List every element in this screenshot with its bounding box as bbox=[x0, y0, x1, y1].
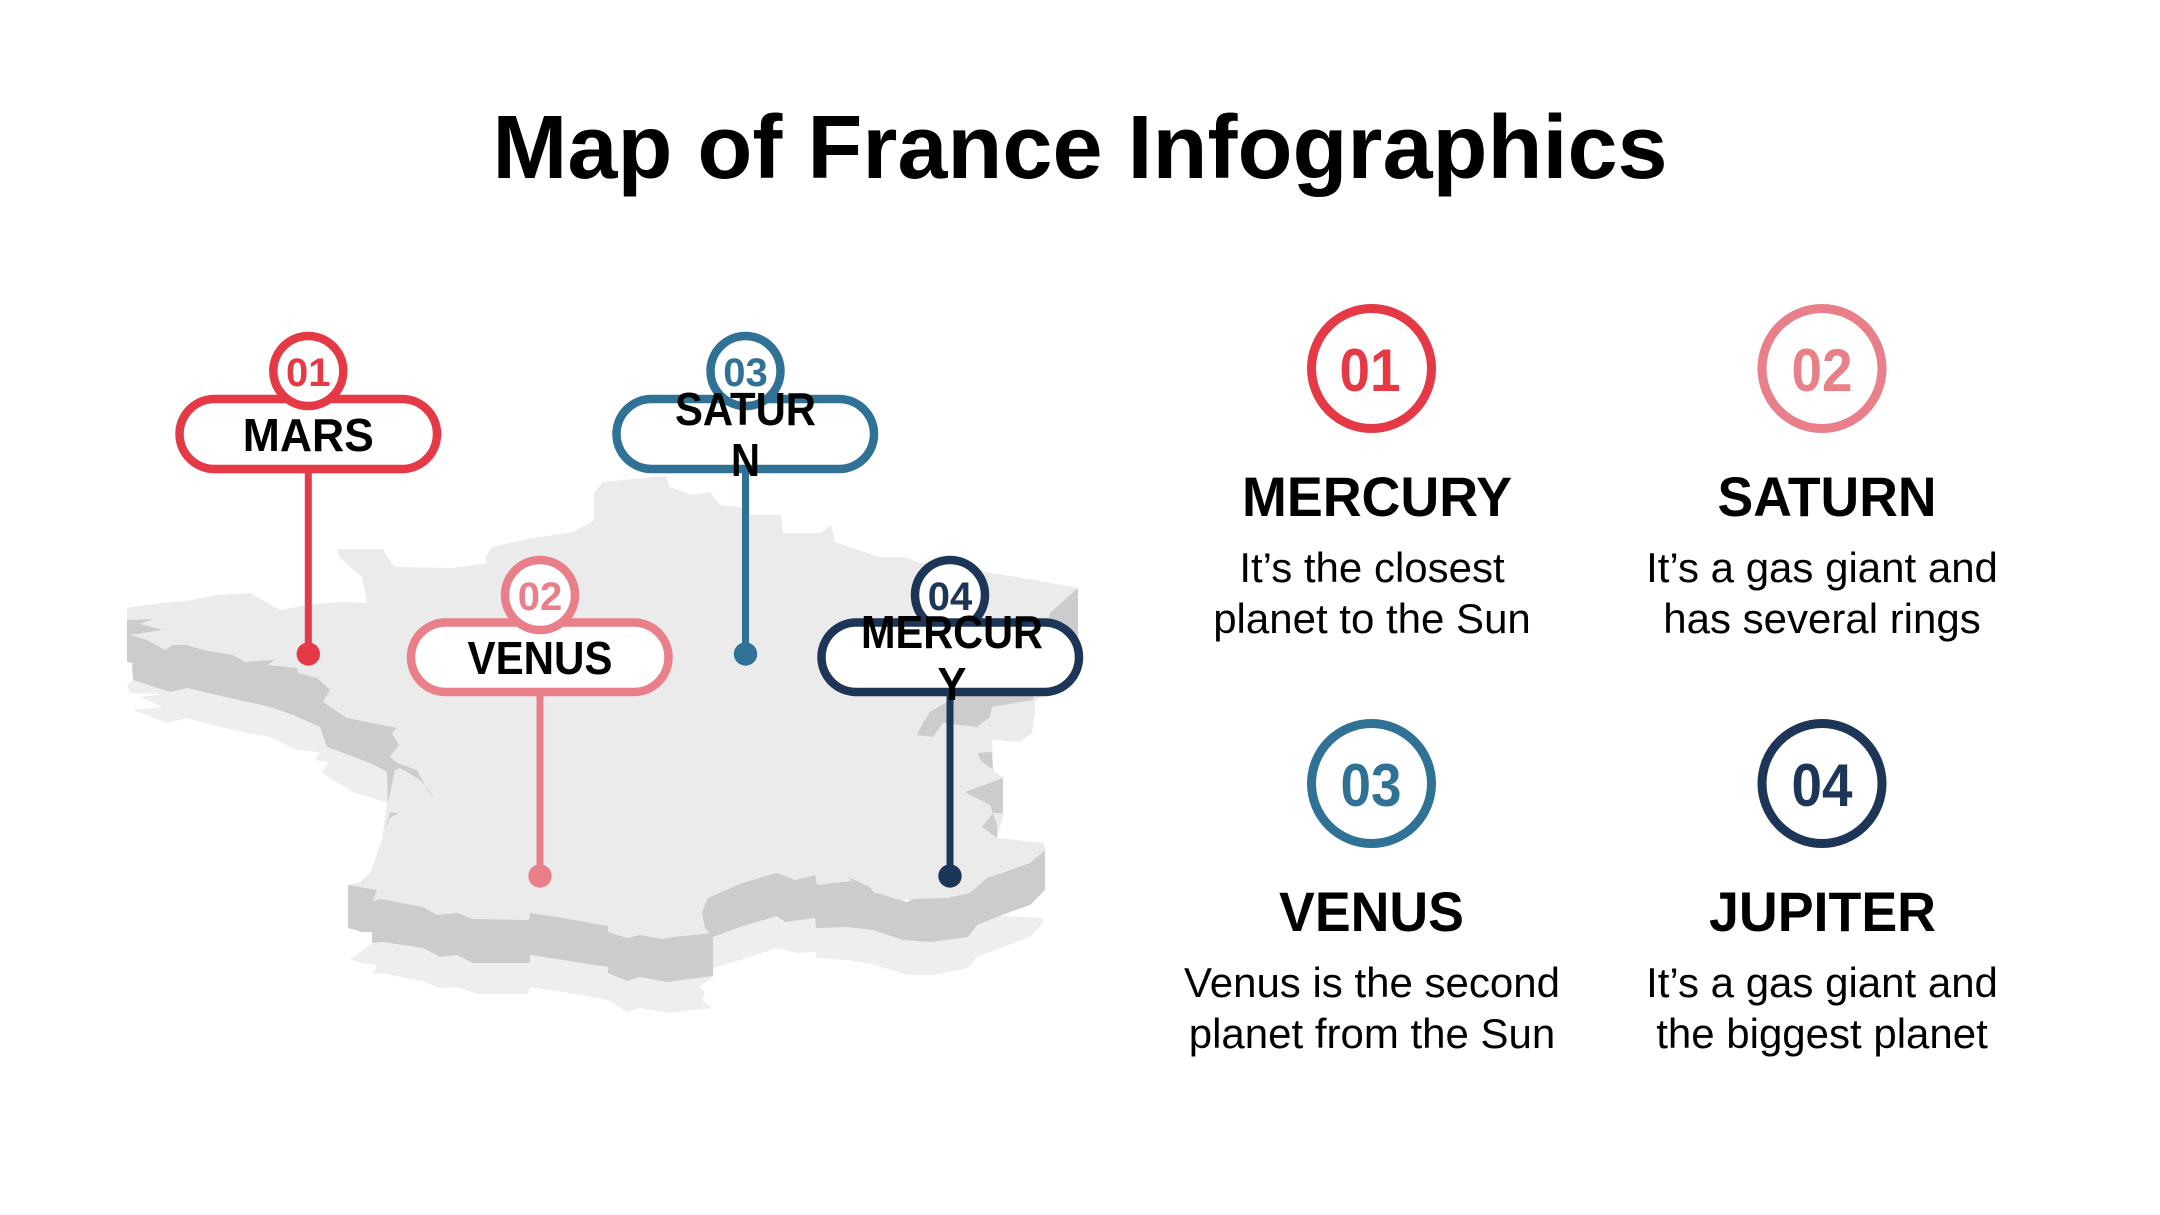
map pin 01 MARS bbox=[180, 336, 437, 666]
map pin 01 MARS: MARS bbox=[243, 409, 374, 461]
info block 01 MERCURY: MERCURY bbox=[1242, 465, 1512, 528]
info block 04 JUPITER: 04 bbox=[1792, 752, 1853, 819]
info block 01 MERCURY bbox=[1213, 308, 1531, 642]
info block 03 VENUS: VENUS bbox=[1279, 880, 1464, 943]
map pin 02 VENUS: VENUS bbox=[468, 632, 612, 684]
info block 04 JUPITER: the biggest planet bbox=[1656, 1010, 1988, 1057]
map pin 02 VENUS: 02 bbox=[518, 575, 562, 619]
map pin 02 VENUS bbox=[411, 560, 668, 888]
map pin 03 SATURN: N bbox=[731, 434, 760, 486]
map pin 04 MERCURY: 04 bbox=[928, 575, 973, 619]
map pin 04 MERCURY bbox=[822, 560, 1079, 888]
info block 03 VENUS: Venus is the second bbox=[1184, 959, 1560, 1006]
map pin 03 SATURN: SATUR bbox=[675, 383, 816, 435]
info block 01 MERCURY: It’s the closest bbox=[1239, 544, 1505, 591]
info block 01 MERCURY: 01 bbox=[1340, 337, 1400, 404]
info block 01 MERCURY: planet to the Sun bbox=[1213, 595, 1531, 642]
map of France bbox=[127, 476, 1078, 1013]
info block 02 SATURN: It’s a gas giant and bbox=[1646, 544, 1998, 591]
info block 03 VENUS: planet from the Sun bbox=[1189, 1010, 1555, 1057]
info block 03 VENUS bbox=[1184, 724, 1560, 1057]
info block 02 SATURN: has several rings bbox=[1663, 595, 1981, 642]
info block 02 SATURN: 02 bbox=[1792, 337, 1852, 404]
info block 04 JUPITER: JUPITER bbox=[1709, 880, 1936, 943]
info block 02 SATURN: SATURN bbox=[1718, 465, 1936, 528]
map pin 04 MERCURY: MERCUR bbox=[861, 606, 1043, 658]
info block 03 VENUS: 03 bbox=[1340, 752, 1402, 819]
info block 04 JUPITER: It’s a gas giant and bbox=[1646, 959, 1998, 1006]
map pin 04 MERCURY: Y bbox=[938, 658, 966, 710]
info block 04 JUPITER bbox=[1646, 724, 1998, 1057]
title: Map of France Infographics bbox=[492, 98, 1668, 198]
map pin 03 SATURN bbox=[616, 336, 874, 666]
map pin 03 SATURN: 03 bbox=[723, 351, 768, 395]
info block 02 SATURN bbox=[1646, 308, 1998, 642]
map pin 01 MARS: 01 bbox=[286, 351, 331, 395]
